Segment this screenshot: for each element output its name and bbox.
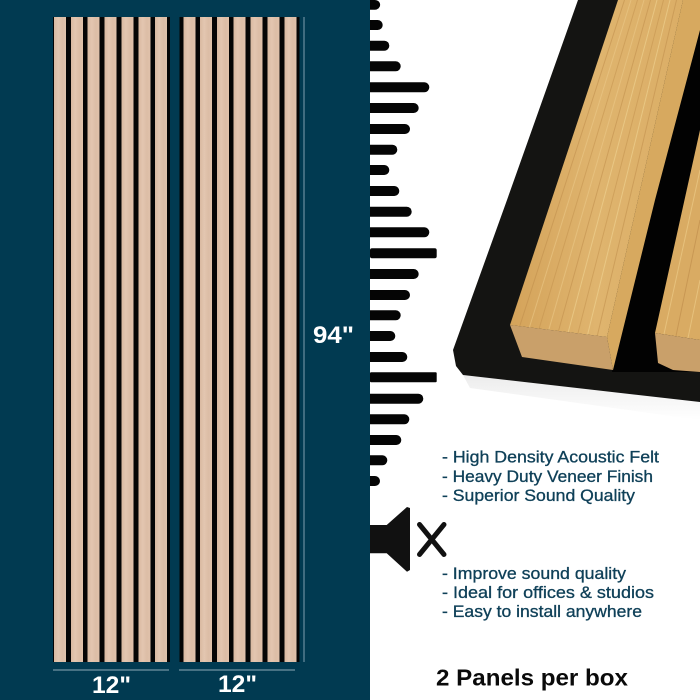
text block: material features: - Heavy Duty Veneer Finish bbox=[442, 468, 653, 486]
text block: benefits: - Improve sound quality bbox=[442, 565, 627, 583]
text block: benefits: - Easy to install anywhere bbox=[442, 603, 642, 621]
panel: teal product dimensions bbox=[0, 0, 370, 700]
right width label: 12" bbox=[218, 671, 257, 698]
text block: benefits: - Ideal for offices & studios bbox=[442, 584, 654, 602]
icon: muted speaker bbox=[370, 507, 444, 572]
slat gap shadow bbox=[612, 0, 700, 372]
photo: slat close-up on felt backing bbox=[453, 0, 700, 420]
front slat bbox=[510, 0, 700, 370]
left width label: 12" bbox=[92, 672, 131, 699]
right width dimension line bbox=[179, 670, 295, 671]
text block: material features: - High Density Acoustic Felt bbox=[442, 449, 659, 467]
felt backing bbox=[453, 0, 700, 402]
text block: material features: - Superior Sound Quality bbox=[442, 487, 636, 505]
box quantity label: 2 Panels per box bbox=[436, 665, 628, 691]
text block: material features bbox=[442, 449, 659, 505]
height dimension line bbox=[304, 17, 305, 662]
right slat panel bbox=[180, 17, 300, 662]
left slat panel bbox=[53, 17, 170, 662]
left width dimension line bbox=[53, 670, 169, 671]
sound wave graphic bbox=[365, 0, 437, 486]
wave overlap mask: teal edge bbox=[360, 0, 370, 700]
height label: 94" bbox=[313, 322, 354, 349]
floor shadow bbox=[463, 375, 700, 420]
text block: benefits bbox=[442, 565, 654, 621]
second slat bbox=[655, 130, 700, 372]
